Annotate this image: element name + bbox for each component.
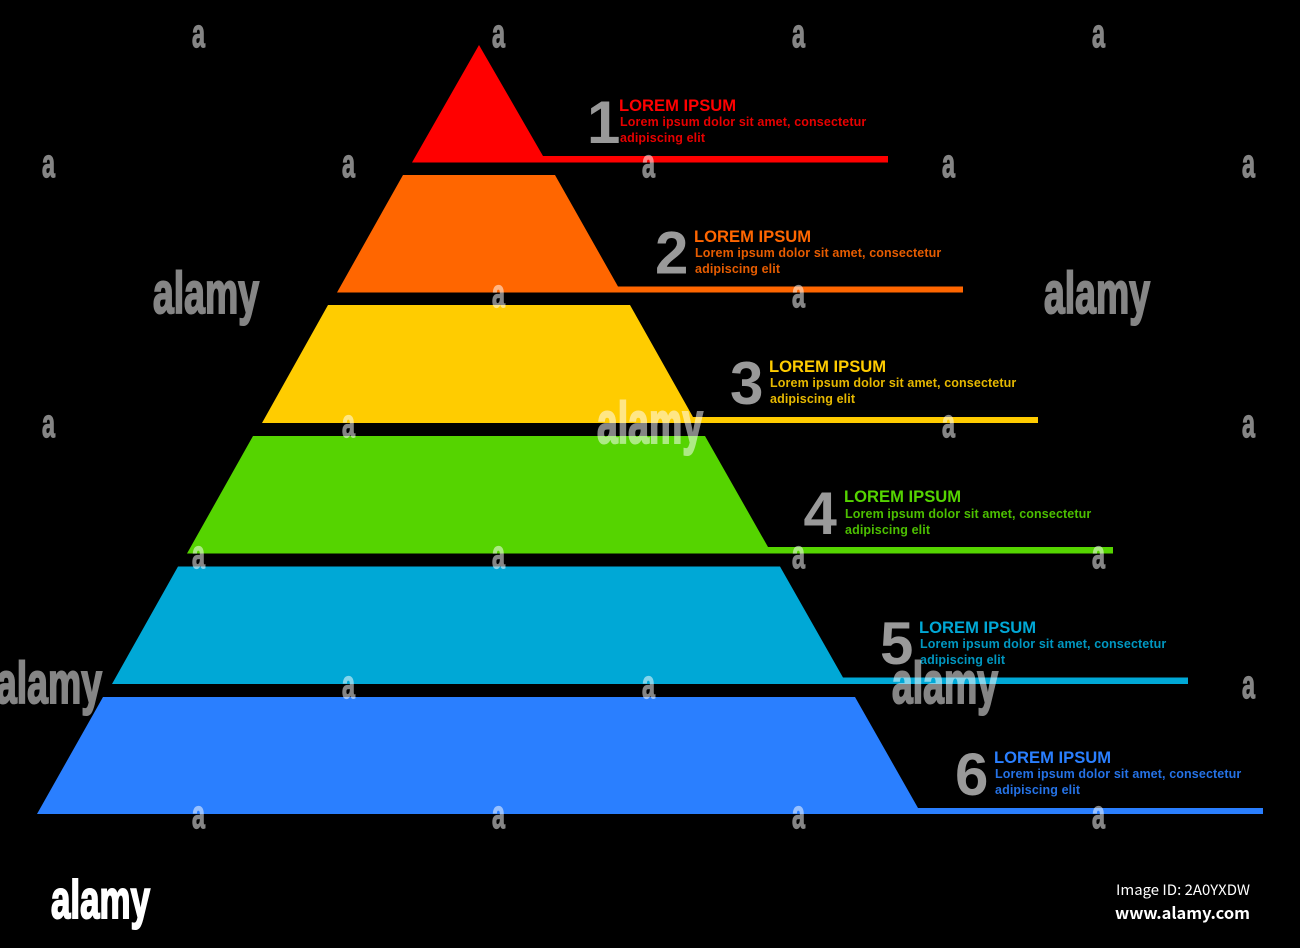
tier 3 description: Lorem ipsum dolor sit amet, consectetur bbox=[770, 376, 1016, 390]
small repeated watermark letters: a bbox=[792, 12, 805, 56]
small repeated watermark letters: a bbox=[492, 272, 505, 316]
small repeated watermark letters: a bbox=[642, 663, 655, 707]
small repeated watermark letters: a bbox=[492, 12, 505, 56]
large repeated watermark logos: alamy bbox=[1044, 261, 1150, 326]
number 2: 2 bbox=[655, 220, 688, 286]
number 4: 4 bbox=[804, 480, 838, 547]
small repeated watermark letters: a bbox=[1242, 663, 1255, 707]
pyramid tier 4 with number and text bbox=[187, 436, 1113, 554]
tier 6 heading: LOREM IPSUM bbox=[994, 748, 1111, 767]
tier 4 heading: LOREM IPSUM bbox=[844, 487, 961, 506]
small repeated watermark letters: a bbox=[492, 533, 505, 577]
number 3: 3 bbox=[730, 350, 763, 417]
alamy logo bottom left: alamy bbox=[51, 870, 150, 930]
tier 6 shape and leader bar bbox=[37, 697, 1263, 814]
small repeated watermark letters: a bbox=[192, 533, 205, 577]
small repeated watermark letters: a bbox=[192, 12, 205, 56]
small repeated watermark letters: a bbox=[1242, 142, 1255, 186]
tier 4 shape and leader bar bbox=[187, 436, 1113, 554]
small repeated watermark letters: a bbox=[792, 272, 805, 316]
small repeated watermark letters: a bbox=[792, 793, 805, 837]
tier 1 heading: LOREM IPSUM bbox=[619, 96, 736, 115]
tier 2 description: Lorem ipsum dolor sit amet, consectetur bbox=[695, 246, 941, 260]
large repeated watermark logos: alamy bbox=[892, 651, 998, 716]
small repeated watermark letters: a bbox=[492, 793, 505, 837]
small repeated watermark letters: a bbox=[42, 402, 55, 446]
tier 3 heading: LOREM IPSUM bbox=[769, 357, 886, 376]
large repeated watermark logos: alamy bbox=[153, 261, 259, 326]
number 5: 5 bbox=[880, 610, 913, 677]
tier 1 shape and leader bar bbox=[412, 45, 888, 162]
pyramid tier 1 with number and text bbox=[412, 45, 888, 162]
small repeated watermark letters: a bbox=[42, 142, 55, 186]
tier 2 shape and leader bar bbox=[337, 175, 963, 292]
small repeated watermark letters: a bbox=[1092, 793, 1105, 837]
small repeated watermark letters: a bbox=[1092, 533, 1105, 577]
small repeated watermark letters: a bbox=[792, 533, 805, 577]
tier 5 description: Lorem ipsum dolor sit amet, consectetur bbox=[920, 637, 1166, 651]
small repeated watermark letters: a bbox=[342, 402, 355, 446]
tier 1 description: Lorem ipsum dolor sit amet, consectetur bbox=[620, 115, 866, 129]
number 6: 6 bbox=[955, 741, 988, 808]
small repeated watermark letters: a bbox=[1242, 402, 1255, 446]
tier 4 description: adipiscing elit bbox=[845, 523, 931, 537]
number 1: 1 bbox=[587, 89, 620, 156]
small repeated watermark letters: a bbox=[192, 793, 205, 837]
pyramid tier 6 with number and text bbox=[37, 697, 1263, 814]
tier 4 description: Lorem ipsum dolor sit amet, consectetur bbox=[845, 507, 1091, 521]
tier 2 description: adipiscing elit bbox=[695, 262, 781, 276]
tier 6 description: adipiscing elit bbox=[995, 783, 1081, 797]
tier 5 heading: LOREM IPSUM bbox=[919, 618, 1036, 637]
tier 5 shape and leader bar bbox=[112, 566, 1188, 684]
large repeated watermark logos: alamy bbox=[0, 651, 102, 716]
pyramid tier 3 with number and text bbox=[262, 305, 1038, 423]
website address: www.alamy.com bbox=[1115, 900, 1250, 924]
small repeated watermark letters: a bbox=[942, 142, 955, 186]
pyramid tier 5 with number and text bbox=[112, 566, 1188, 684]
pyramid tier 2 with number and text bbox=[337, 175, 963, 292]
small repeated watermark letters: a bbox=[642, 142, 655, 186]
tier 1 description: adipiscing elit bbox=[620, 131, 706, 145]
image ID: Image ID: 2A0YXDW bbox=[1116, 879, 1250, 900]
large repeated watermark logos bbox=[0, 261, 1150, 716]
tier 5 description: adipiscing elit bbox=[920, 653, 1006, 667]
small repeated watermark letters: a bbox=[342, 142, 355, 186]
tier 3 description: adipiscing elit bbox=[770, 392, 856, 406]
small repeated watermark letters: a bbox=[1092, 12, 1105, 56]
small repeated watermark letters: a bbox=[942, 402, 955, 446]
tier 6 description: Lorem ipsum dolor sit amet, consectetur bbox=[995, 767, 1241, 781]
tier 3 shape and leader bar bbox=[262, 305, 1038, 423]
small repeated watermark letters: a bbox=[342, 663, 355, 707]
tier 2 heading: LOREM IPSUM bbox=[694, 227, 811, 246]
large repeated watermark logos: alamy bbox=[597, 391, 703, 456]
